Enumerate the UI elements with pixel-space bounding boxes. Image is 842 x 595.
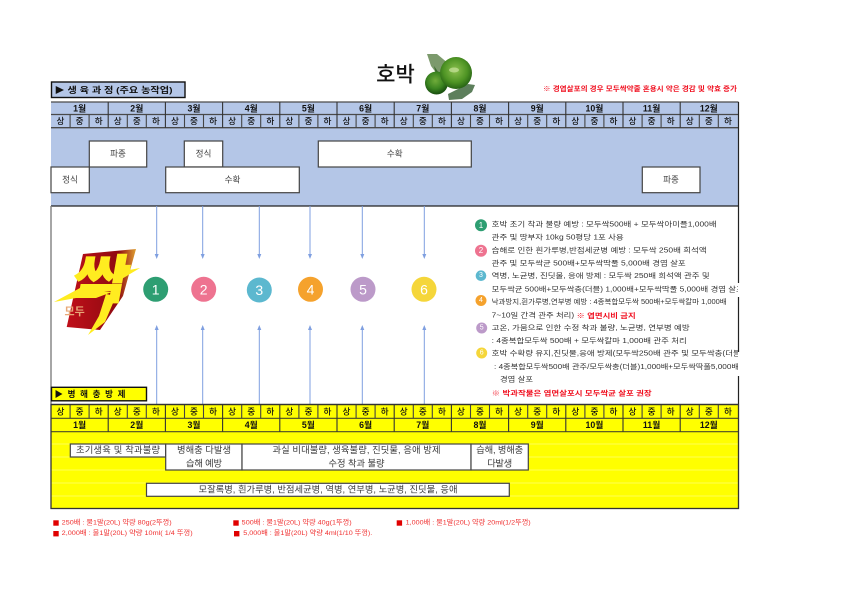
month labels top: 4월 <box>245 102 258 113</box>
task: transplant Mar <box>184 141 223 167</box>
legend item 2000x <box>53 528 193 537</box>
spray notes: 역병, 노균병, 진딧물, 응애 방제 : 모두싹 250배 희석액 관주 및 <box>492 271 710 280</box>
title: 호박 <box>376 64 415 86</box>
issue: fruit enlargement: 수정 착과 불량 <box>328 457 385 468</box>
month labels bottom: 6월 <box>359 419 372 430</box>
issue: early growth: 초기생육 및 착과불량 <box>76 444 160 455</box>
icon: step 6 <box>412 277 436 302</box>
icon: step 4: 4 <box>307 281 315 297</box>
month labels bottom: 8월 <box>474 419 486 430</box>
task: transplant Mar: 정식 <box>196 148 211 158</box>
legend item 500x: 500배 : 물1말(20L) 약량 40g(1뚜껑) <box>242 518 352 526</box>
spray notes: 경엽 살포 <box>500 374 534 384</box>
icon: note 6 <box>476 348 487 358</box>
icon: note 3 <box>476 270 486 281</box>
month labels top: 8월 <box>474 102 486 113</box>
icon: note 5: 5 <box>480 324 484 332</box>
icon: step 2: 2 <box>200 281 208 297</box>
icon: step 2 <box>191 277 216 302</box>
month labels bottom: 4월 <box>245 419 258 430</box>
issue: pest outbreak <box>166 444 242 470</box>
spray notes: 낙과방지,흰가루병,연부병 예방 : 4종복합모두싹 500배+모두싹칼마 1,000배 <box>492 297 727 306</box>
panel: pest control middle area <box>51 206 738 404</box>
legend: dilution rates <box>53 518 531 537</box>
spray notes: : 4종복합모두싹500배 관주/모두싹충(더블)1,000배+모두싹딱풀5,000배 <box>494 362 739 371</box>
issue: wet damage <box>471 444 528 470</box>
issue: diseases: 모잘록병, 흰가루병, 반점세균병, 역병, 연부병, 노균병, 진딧물, 응애 <box>198 483 458 494</box>
heading: growth stages <box>52 82 185 98</box>
month labels top: 11월 <box>643 102 660 113</box>
month labels top: 2월 <box>130 102 143 113</box>
heading: pest control <box>52 387 146 401</box>
icon: note 1 <box>475 219 487 231</box>
spray notes: 관주 및 땅부자 10kg 50평당 1포 사용 <box>492 232 624 242</box>
spray notes: 관주 및 모두싹균 500배+모두싹딱풀 5,000배 경엽 살포 <box>492 258 686 268</box>
month labels bottom: 5월 <box>302 419 315 430</box>
month labels bottom: 2월 <box>130 419 143 430</box>
spray notes: 모두싹균 500배+모두싹충(더블) 1,000배+모두싹딱풀 5,000배 경엽 살포 <box>492 284 744 294</box>
icon: note 1: 1 <box>479 221 484 230</box>
icon: note 2 <box>475 245 487 257</box>
logo: modu ssak: 싹 <box>68 252 134 310</box>
issue: fruit enlargement: 과실 비대불량, 생육불량, 진딧물, 응애 방제 <box>272 444 440 455</box>
task: harvest Mar-May <box>166 167 299 193</box>
legend item 1000x: 1,000배 : 물1말(20L) 약량 20ml(1/2뚜껑) <box>406 518 531 526</box>
infographic canvas <box>50 54 740 536</box>
icon: note 5 <box>476 322 487 334</box>
icon: note 4: 4 <box>479 297 483 304</box>
icon: note 4 <box>476 295 486 306</box>
spray notes: 7~10일 간격 관주 처리) ※ 엽면시비 금지 <box>492 310 636 320</box>
logo: modu ssak: 모두 <box>64 305 85 318</box>
issue: pest outbreak: 습해 예방 <box>186 457 222 468</box>
icon: step 3 <box>247 278 272 302</box>
task: transplant Jan <box>51 167 89 193</box>
month labels top: 6월 <box>359 102 372 113</box>
month labels bottom: 10월 <box>585 419 603 430</box>
month labels top: 12월 <box>700 102 718 113</box>
month labels top: 1월 <box>73 102 86 113</box>
heading: growth stages: ▶ 생 육 과 정 (주요 농작업) <box>54 85 173 95</box>
task: harvest May-Aug: 수확 <box>387 148 403 158</box>
logo: modu ssak <box>54 249 140 335</box>
legend item 250x: 250배 : 물1말(20L) 약량 80g(2뚜껑) <box>62 518 172 526</box>
legend item 1000x <box>397 518 531 526</box>
icon: note 2: 2 <box>479 246 484 255</box>
month labels top <box>73 102 718 113</box>
legend item 500x <box>233 518 352 526</box>
icon: step 3: 3 <box>255 282 263 298</box>
spray notes: 고온, 가뭄으로 인한 수정 착과 불량, 노균병, 연부병 예방 <box>492 323 690 332</box>
task: sowing Nov <box>642 167 700 193</box>
issue: pest outbreak: 병해충 다발생 <box>177 444 231 455</box>
spray notes: ※ 박과작물은 엽면살포시 모두싹균 살포 권장 <box>492 388 652 398</box>
icon: step 4 <box>298 277 323 302</box>
month labels bottom: 9월 <box>531 419 544 430</box>
icon: step 5: 5 <box>359 281 367 297</box>
icon: pumpkin photo <box>425 54 475 100</box>
legend item 5000x <box>234 528 372 537</box>
month labels bottom: 7월 <box>416 419 429 430</box>
month labels bottom: 12월 <box>700 419 718 430</box>
icon: step 5 <box>350 277 376 302</box>
arrows from calendar to spray steps <box>155 206 426 404</box>
legend item 2000x: 2,000배 : 물1말(20L) 약량 10ml( 1/4 뚜껑) <box>62 528 193 537</box>
icon: step 6: 6 <box>420 281 428 297</box>
month labels bottom <box>73 419 718 430</box>
task: sowing Jan-Feb <box>89 141 147 167</box>
ten-day labels top: 상중하상중하상중하상중하상중하상중하상중하상중하상중하상중하상중하상중하 <box>57 115 732 126</box>
month labels top: 7월 <box>416 102 429 113</box>
issue: wet damage: 습해, 병해충 <box>476 444 524 455</box>
spray program text block <box>475 219 744 398</box>
icon: step 1: 1 <box>152 281 160 297</box>
issue: early growth <box>70 444 166 457</box>
spray notes: 습해로 인한 흰가루병,반점세균병 예방 : 모두싹 250배 희석액 <box>492 246 707 254</box>
legend item 250x <box>53 518 172 526</box>
issue: diseases <box>146 483 509 496</box>
issue: fruit enlargement <box>242 444 471 470</box>
task: sowing Jan-Feb: 파종 <box>110 148 126 158</box>
issue: wet damage: 다발생 <box>487 458 512 468</box>
task: transplant Jan: 정식 <box>62 174 78 184</box>
month labels bottom: 3월 <box>188 419 200 430</box>
note: foliar spray warning: ※ 경엽살포의 경우 모두싹약줄 혼용시 약은 경감 및 약효 증가 <box>543 84 738 93</box>
heading: pest control: ▶ 병 해 충 방 제 <box>54 389 126 399</box>
ten-day labels bottom: 상중하상중하상중하상중하상중하상중하상중하상중하상중하상중하상중하상중하 <box>57 405 732 416</box>
month labels bottom: 1월 <box>73 419 86 430</box>
month labels bottom: 11월 <box>643 419 660 430</box>
panel: growth calendar <box>51 102 738 206</box>
task: harvest Mar-May: 수확 <box>225 174 240 184</box>
spray notes: : 4종복합모두싹 500배 + 모두싹칼마 1,000배 관주 처리 <box>492 336 687 345</box>
spray notes: 호박 수확량 유지,진딧물,응애 방제(모두싹250배 관주 및 모두싹충(더블) <box>492 348 744 358</box>
task: sowing Nov: 파종 <box>663 174 679 184</box>
icon: note 6: 6 <box>480 350 484 356</box>
month labels top: 9월 <box>531 102 544 113</box>
month labels top: 3월 <box>188 102 200 113</box>
legend item 5000x: 5,000배 : 물1말(20L) 약량 4ml(1/10 뚜껑). <box>243 528 372 537</box>
month labels top: 5월 <box>302 102 315 113</box>
spray notes <box>492 220 744 398</box>
task: harvest May-Aug <box>318 141 471 167</box>
panel: pest calendar <box>51 404 738 508</box>
icon: note 3: 3 <box>479 272 483 279</box>
icon: step 1 <box>143 277 168 302</box>
month labels top: 10월 <box>585 102 603 113</box>
spray notes: 호박 초기 착과 불량 예방 : 모두싹500배 + 모두싹아미플1,000배 <box>492 220 717 228</box>
